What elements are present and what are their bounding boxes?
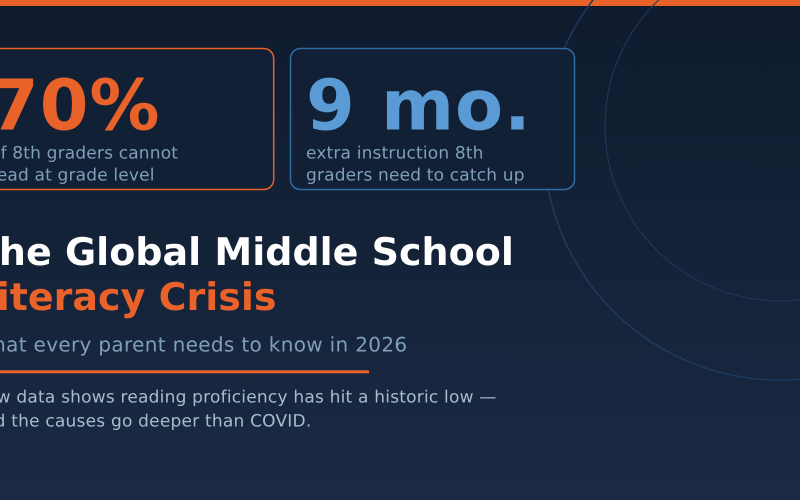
accent divider [0, 370, 369, 373]
stat card: 9 mo. [290, 48, 574, 190]
stat card: 70% [0, 48, 274, 190]
stat caption: extra instruction 8th [306, 144, 484, 164]
stat number: 9 mo. [306, 64, 532, 146]
top accent bar [0, 0, 800, 6]
decorative rings [544, 0, 800, 380]
stat caption: graders need to catch up [306, 166, 525, 186]
